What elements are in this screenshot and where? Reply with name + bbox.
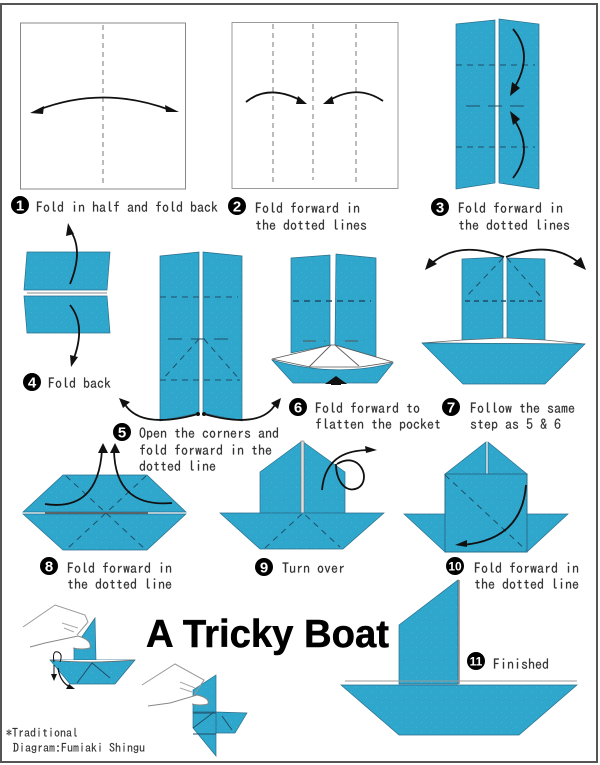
- hand holding folded sail illustration: [142, 664, 247, 756]
- step 2 caption: Fold forward in: [255, 201, 360, 215]
- step 1 caption: 1: [16, 198, 24, 214]
- step 4 caption: [23, 373, 111, 392]
- step 5 caption: fold forward in the: [139, 443, 272, 457]
- step 3 caption: [431, 198, 570, 232]
- step 11 caption: [467, 652, 549, 671]
- step 10 caption: Fold forward in: [474, 561, 579, 575]
- credits: *Traditional: [6, 727, 78, 739]
- step 2 diagram: [232, 22, 398, 188]
- step 1 caption: Fold in half and fold back: [36, 200, 218, 214]
- credits: [6, 727, 145, 754]
- step 5 caption: Open the corners and: [139, 426, 279, 440]
- step 2 caption: [228, 197, 367, 232]
- step 8 caption: the dotted line: [67, 577, 172, 591]
- step 9 caption: 9: [260, 560, 268, 576]
- step 8 caption: [40, 557, 172, 591]
- title: A Tricky Boat: [146, 613, 389, 656]
- step 1 caption: [11, 196, 218, 214]
- step 10 diagram: [404, 442, 568, 552]
- step 3 caption: 3: [436, 200, 444, 216]
- step 6 caption: 6: [294, 400, 302, 416]
- step 7 caption: 7: [447, 400, 455, 416]
- step 9 caption: Turn over: [282, 561, 345, 575]
- step 5 caption: 5: [118, 424, 126, 442]
- step 3 caption: the dotted lines: [458, 218, 570, 232]
- step 7 diagram: [422, 250, 586, 384]
- step 5 caption: [113, 423, 279, 473]
- step 5 diagram: [119, 252, 281, 421]
- step 10 caption: [446, 557, 579, 591]
- step 11 caption: Finished: [493, 657, 549, 671]
- step 4 diagram: [24, 223, 110, 367]
- step 2 caption: the dotted lines: [255, 218, 367, 232]
- step 6 diagram: [272, 254, 393, 385]
- step 9 diagram: [220, 441, 384, 549]
- step 7 caption: step as 5 & 6: [470, 417, 561, 431]
- step 6 caption: flatten the pocket: [315, 417, 441, 431]
- step 10 caption: the dotted line: [474, 577, 579, 591]
- step 7 caption: [442, 398, 575, 431]
- step 6 caption: Fold forward to: [315, 401, 420, 415]
- step 8 caption: Fold forward in: [67, 561, 172, 575]
- step 11 caption: 11: [470, 654, 483, 668]
- step 11 finished boat: [341, 580, 577, 735]
- step 4 caption: 4: [28, 374, 37, 392]
- step 5 caption: dotted line: [139, 459, 216, 473]
- step 9 caption: [255, 558, 345, 576]
- step 4 caption: Fold back: [48, 376, 111, 390]
- step 6 caption: [289, 398, 441, 431]
- step 8 diagram: [23, 443, 186, 550]
- step 2 caption: 2: [233, 198, 241, 216]
- step 3 caption: Fold forward in: [458, 201, 563, 215]
- credits: Diagram:Fumiaki Shingu: [13, 742, 145, 754]
- step 7 caption: Follow the same: [470, 401, 575, 415]
- step 1 diagram: [20, 23, 186, 189]
- hand holding boat illustration: [23, 605, 135, 689]
- step 10 caption: 10: [448, 560, 462, 574]
- step 8 caption: 8: [45, 558, 53, 576]
- step 3 diagram: [456, 19, 539, 189]
